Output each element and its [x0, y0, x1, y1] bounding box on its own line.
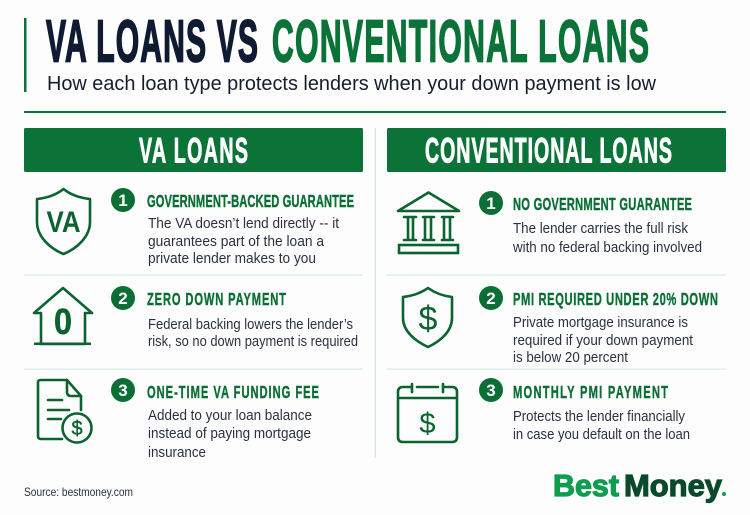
icon: calendar with dollar: $: [419, 408, 436, 440]
heading: GOVERNMENT-BACKED GUARANTEE: [147, 191, 354, 212]
body text: [512, 221, 702, 256]
header: conventional loans: CONVENTIONAL LOANS: [425, 132, 672, 171]
heading: MONTHLY PMI PAYMENT: [513, 382, 668, 403]
header: conventional loans: [387, 128, 726, 172]
icon: calendar with dollar: [398, 384, 457, 442]
heading: NO GOVERNMENT GUARANTEE: [513, 194, 692, 215]
icon: shield with dollar: $: [419, 300, 438, 338]
number 2: [111, 286, 135, 310]
logo: BestMoney: [553, 468, 726, 503]
conventional item 2: PMI required: [403, 286, 718, 366]
logo: BestMoney: Money: [624, 468, 723, 503]
icon: shield with dollar: [403, 288, 452, 347]
number 2: 2: [486, 289, 496, 308]
body text: with no federal backing involved: [512, 240, 702, 256]
title: VA LOANS VS: [46, 9, 258, 74]
icon: house with zero: 0: [54, 301, 72, 342]
number 1: 1: [486, 194, 496, 213]
number 1: 1: [118, 191, 128, 210]
icon: VA shield: VA: [46, 206, 80, 239]
body text: in case you default on the loan: [513, 427, 690, 443]
body text: is below 20 percent: [513, 350, 628, 366]
number 2: 2: [118, 289, 128, 308]
body text: Protects the lender financially: [513, 409, 686, 425]
body text: Added to your loan balance: [148, 408, 312, 424]
icon: house with zero: [34, 288, 92, 345]
heading: PMI REQUIRED UNDER 20% DOWN: [513, 289, 718, 310]
body text: risk, so no down payment is required: [148, 334, 358, 350]
number 2: [479, 286, 503, 310]
body text: Federal backing lowers the lender’s: [148, 317, 353, 333]
icon: document with dollar: [38, 380, 92, 442]
number 1: [479, 191, 503, 215]
body text: insurance: [148, 445, 206, 461]
number 3: 3: [486, 381, 496, 400]
icon: VA shield: [37, 189, 90, 254]
body text: Private mortgage insurance is: [513, 315, 688, 331]
body text: required if your down payment: [513, 333, 693, 349]
body text: The VA doesn’t lend directly -- it: [148, 216, 339, 232]
icon: document with dollar: $: [71, 418, 83, 440]
title: [46, 9, 649, 74]
number 3: [111, 378, 135, 402]
header: VA loans: [24, 128, 363, 172]
body text: [513, 409, 690, 443]
heading: ONE-TIME VA FUNDING FEE: [147, 382, 319, 403]
icon: bank building: [398, 192, 459, 253]
number 1: [111, 188, 135, 212]
body text: [148, 216, 339, 267]
number 3: [479, 378, 503, 402]
body text: private lender makes to you: [148, 251, 316, 267]
title: CONVENTIONAL LOANS: [272, 9, 649, 74]
number 3: 3: [118, 381, 128, 400]
VA item 2: zero down payment: [34, 286, 358, 350]
body text: [148, 408, 312, 461]
panel: VA loans: [24, 128, 363, 461]
subtitle: How each loan type protects lenders when your down payment is low: [47, 73, 657, 95]
source: Source: bestmoney.com: [24, 485, 133, 499]
VA item 1: government-backed guarantee: [37, 188, 354, 267]
header: VA loans: VA LOANS: [139, 132, 248, 171]
logo: BestMoney: Best: [553, 468, 619, 503]
body text: [148, 317, 358, 350]
panel: conventional loans: [387, 128, 726, 443]
heading: ZERO DOWN PAYMENT: [147, 289, 286, 310]
body text: [513, 315, 693, 366]
body text: The lender carries the full risk: [513, 221, 689, 237]
body text: instead of paying mortgage: [148, 426, 311, 442]
conventional item 3: monthly PMI: [398, 378, 690, 443]
VA item 3: one-time funding fee: [38, 378, 319, 461]
conventional item 1: no government guarantee: [398, 191, 702, 256]
body text: guarantees part of the loan a: [148, 234, 325, 250]
